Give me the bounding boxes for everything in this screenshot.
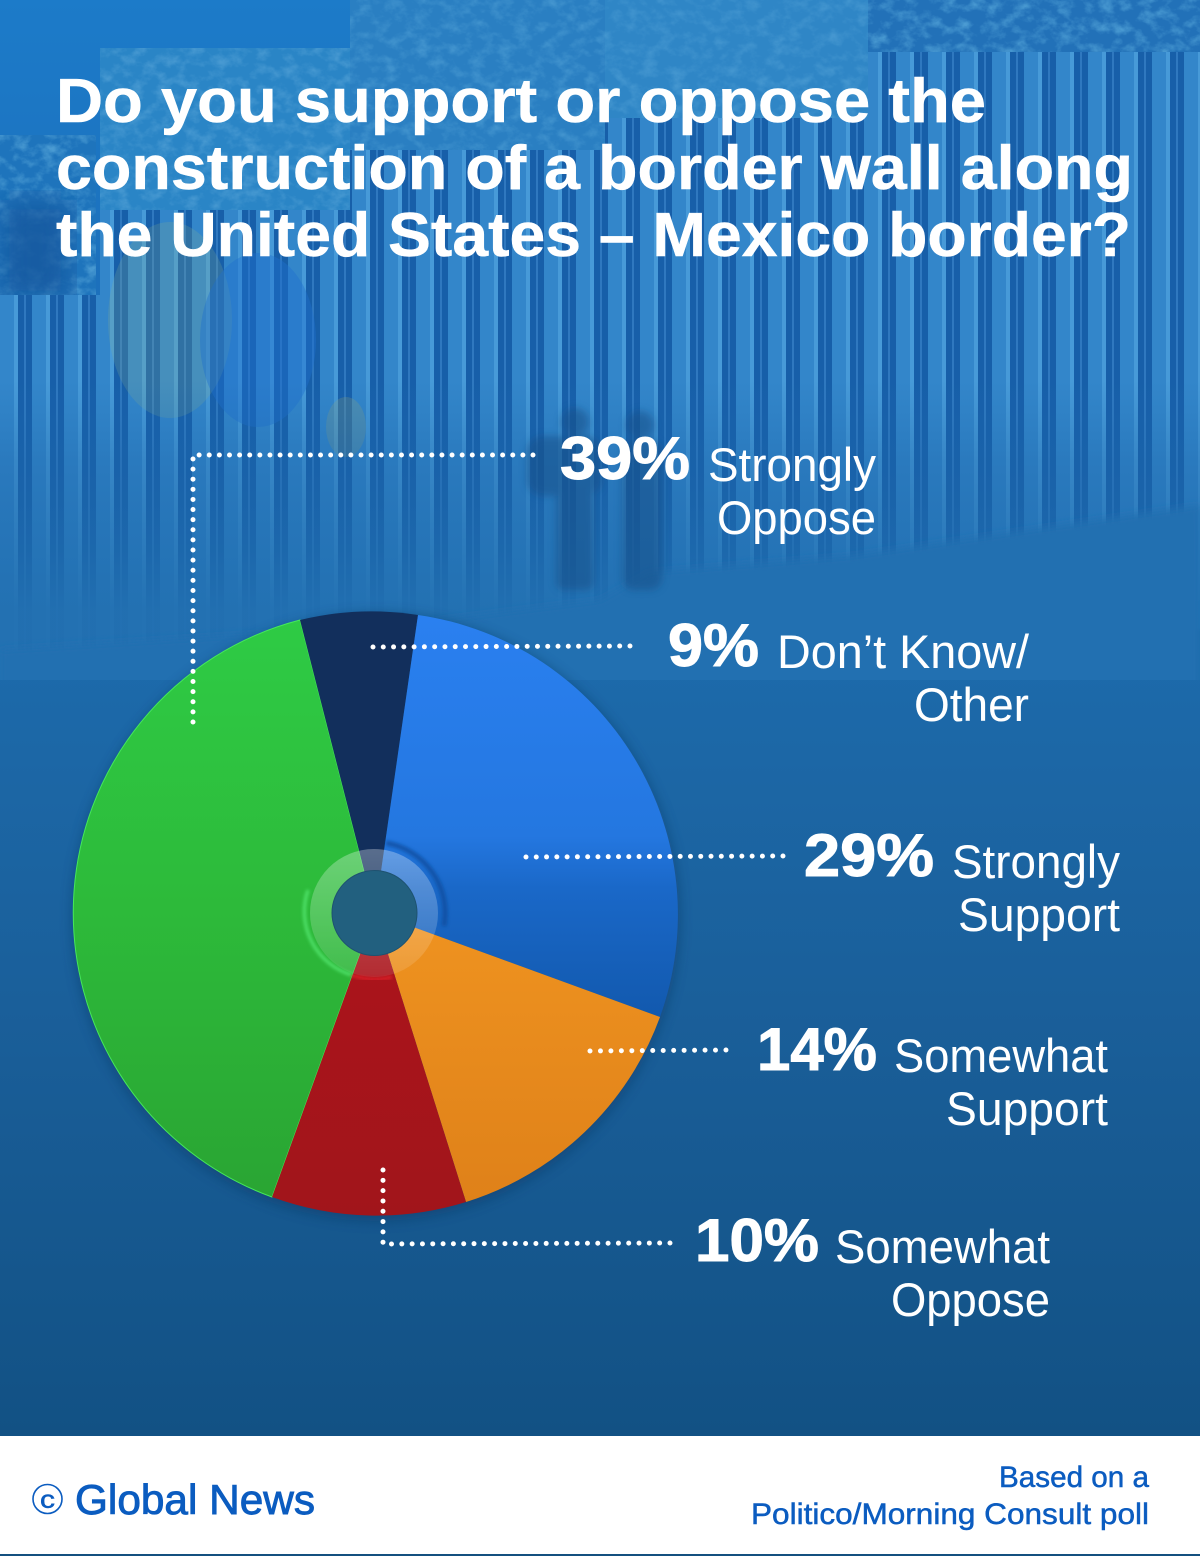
label: 39% strongly oppose: [560, 425, 876, 544]
label: 29% strongly support: 29%: [804, 822, 934, 889]
pie chart: [72, 611, 680, 1221]
source note: Based on a: [999, 1461, 1149, 1494]
title: [56, 67, 1133, 270]
source note: Politico/Morning Consult poll: [751, 1498, 1149, 1531]
label: 14% somewhat support: Support: [946, 1082, 1108, 1135]
centre hub ring: [304, 843, 445, 979]
credit: Global News: c: [40, 1486, 55, 1514]
label: 10% somewhat oppose: Somewhat: [835, 1220, 1050, 1273]
label: 10% somewhat oppose: [695, 1207, 1050, 1326]
concrete panels: [0, 0, 1200, 300]
title: construction of a border wall along: [56, 134, 1133, 203]
label: 14% somewhat support: Somewhat: [894, 1029, 1108, 1082]
credit: Global News: Global News: [75, 1476, 315, 1523]
label: 9% don't know: 9%: [668, 612, 759, 679]
title: Do you support or oppose the: [56, 67, 986, 136]
ground: [17, 506, 1200, 679]
slice: somewhat oppose 10%: [272, 913, 466, 1216]
label: 9% don't know: Don’t Know/: [777, 625, 1030, 678]
label: 10% somewhat oppose: Oppose: [891, 1273, 1050, 1326]
steel pickets: [0, 52, 1200, 579]
label: 10% somewhat oppose: 10%: [695, 1207, 819, 1274]
slice: strongly oppose 39%: [73, 620, 375, 1197]
slice: don't know 9%: [300, 611, 418, 913]
leader lines: [193, 455, 784, 1244]
label: 14% somewhat support: 14%: [757, 1016, 877, 1083]
fence fade into background: [0, 407, 1200, 680]
label: 9% don't know: [668, 612, 1030, 731]
label: 29% strongly support: Strongly: [952, 835, 1120, 888]
label: 29% strongly support: [804, 822, 1120, 941]
label: 39% strongly oppose: Strongly: [708, 438, 876, 491]
label: 39% strongly oppose: 39%: [560, 425, 690, 492]
title: the United States – Mexico border?: [56, 201, 1131, 270]
label: 14% somewhat support: [757, 1016, 1108, 1135]
centre hole: [332, 870, 417, 956]
background photo: border wall: [0, 0, 1200, 720]
source note: [751, 1461, 1149, 1531]
label: 39% strongly oppose: Oppose: [717, 491, 876, 544]
slice: strongly support 29%: [375, 615, 678, 1017]
label: 29% strongly support: Support: [958, 888, 1120, 941]
painted shapes on fence: [108, 222, 366, 457]
footer panel: [0, 1436, 1200, 1556]
slice: somewhat support 14%: [375, 913, 660, 1202]
pie shadow: [72, 613, 680, 1221]
background: people by the fence: [527, 408, 662, 590]
label: 9% don't know: Other: [914, 678, 1029, 731]
